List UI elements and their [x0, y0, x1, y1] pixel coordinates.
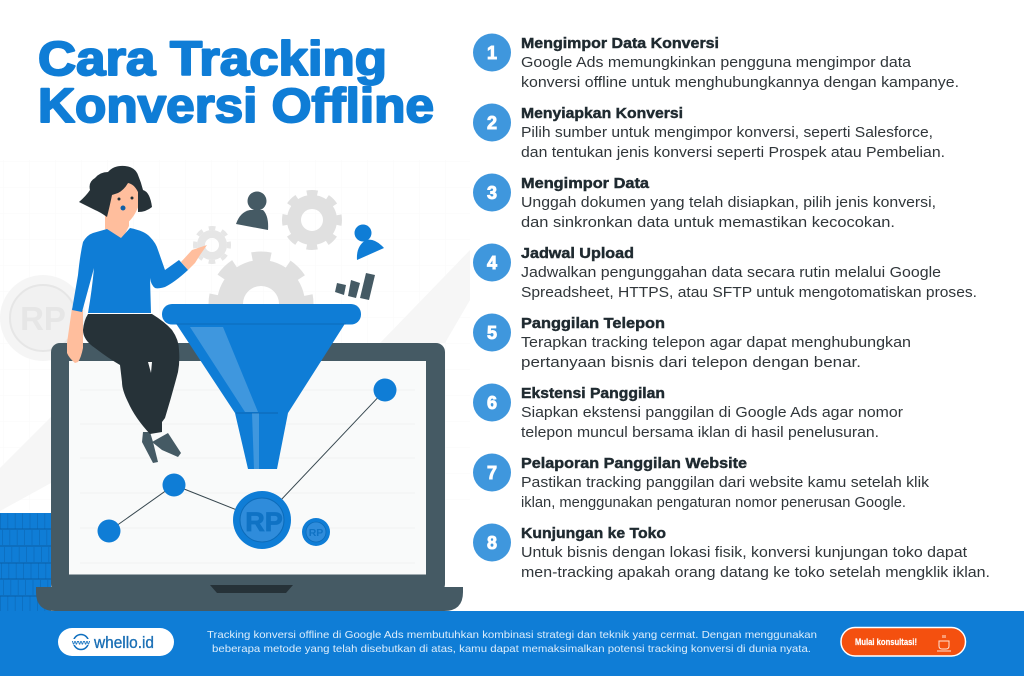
title: Konversi Offline: [38, 80, 434, 133]
step 6: Siapkan ekstensi panggilan di Google Ads agar nomor: [521, 405, 903, 421]
title: Cara Tracking: [38, 33, 387, 86]
illustration: laptop: [36, 343, 463, 611]
footer text: beberapa metode yang telah disebutkan di atas, kamu dapat memaksimalkan potensi tracking konversi di dunia nyata.: [212, 643, 811, 655]
step 2: 2: [487, 113, 497, 133]
step 7: iklan, menggunakan pengaturan nomor penerusan Google.: [521, 495, 906, 511]
icon: dark person: [236, 192, 268, 230]
background grid and diagonal arrow: [0, 160, 470, 511]
eyes: [118, 198, 120, 200]
illustration: line chart: [98, 378, 396, 549]
step 2: [473, 104, 945, 161]
step 8: [473, 524, 990, 581]
step 6: telepon muncul bersama iklan di hasil penelusuran.: [521, 425, 879, 441]
icon: small bar chart: [335, 273, 375, 300]
step 4: 4: [487, 253, 497, 273]
step 4: Jadwal Upload: [521, 245, 634, 262]
step 5: [473, 314, 911, 371]
face: [107, 180, 139, 223]
step 4: [473, 244, 977, 301]
step 8: Kunjungan ke Toko: [521, 525, 666, 542]
illustration: coin stacks: [0, 513, 51, 611]
step 6: 6: [487, 393, 497, 413]
step 8: men-tracking apakah orang datang ke toko setelah mengklik iklan.: [521, 565, 990, 581]
sweater: [72, 228, 188, 313]
title: [38, 33, 434, 133]
icon: blue person: [354, 224, 384, 260]
footer text: Tracking konversi offline di Google Ads membutuhkan kombinasi strategi dan teknik yang cermat. Dengan menggunakan: [207, 629, 817, 641]
illustration: background Rp coin: [0, 275, 86, 361]
call to action button: Mulai konsultasi!: [855, 637, 917, 647]
leg gap: [148, 362, 152, 373]
step 2: Menyiapkan Konversi: [521, 105, 683, 122]
illustration: background Rp coin: RP: [20, 300, 66, 337]
step 3: Mengimpor Data: [521, 175, 650, 192]
step 7: Pastikan tracking panggilan dari website kamu setelah klik: [521, 475, 930, 491]
illustration: funnel: [162, 304, 361, 469]
logo pill: www: [71, 640, 91, 646]
step 1: Mengimpor Data Konversi: [521, 35, 719, 52]
logo pill: [58, 628, 174, 656]
step 8: 8: [487, 533, 497, 553]
steps list: [473, 34, 990, 581]
hair: [79, 166, 152, 217]
left hand: [67, 308, 83, 363]
pants: [83, 314, 179, 434]
call to action button: [841, 628, 966, 656]
illustration: gears: [193, 190, 342, 304]
hand on gear: [181, 245, 207, 270]
step 6: Ekstensi Panggilan: [521, 385, 665, 402]
step 3: Unggah dokumen yang telah disiapkan, pilih jenis konversi,: [521, 195, 936, 211]
step 3: [473, 174, 936, 231]
step 5: pertanyaan bisnis dari telepon dengan benar.: [521, 355, 861, 371]
step 1: [473, 34, 959, 91]
lips: [120, 206, 126, 210]
shoes: [142, 432, 158, 463]
footer band: [0, 611, 1024, 676]
step 7: 7: [487, 463, 497, 483]
step 7: [473, 454, 930, 511]
step 3: dan sinkronkan data untuk memastikan kecocokan.: [521, 215, 895, 231]
step 5: 5: [487, 323, 497, 343]
step 5: Terapkan tracking telepon agar dapat menghubungkan: [521, 335, 911, 351]
step 5: Panggilan Telepon: [521, 315, 665, 332]
step 6: [473, 384, 903, 441]
step 3: 3: [487, 183, 497, 203]
footer text: [207, 629, 817, 655]
step 1: konversi offline untuk menghubungkannya dengan kampanye.: [521, 75, 959, 91]
step 4: Jadwalkan pengunggahan data secara rutin melalui Google: [521, 265, 941, 281]
step 1: 1: [487, 43, 497, 63]
step 2: dan tentukan jenis konversi seperti Prospek atau Pembelian.: [521, 145, 945, 161]
step 7: Pelaporan Panggilan Website: [521, 455, 747, 472]
step 1: Google Ads memungkinkan pengguna mengimpor data: [521, 55, 912, 71]
logo pill: whello.id: [93, 633, 154, 652]
neck: [105, 210, 129, 240]
step 8: Untuk bisnis dengan lokasi fisik, konversi kunjungan toko dapat: [521, 545, 967, 561]
illustration: line chart: RP: [309, 527, 323, 539]
illustration: line chart: RP: [245, 507, 283, 537]
step 2: Pilih sumber untuk mengimpor konversi, seperti Salesforce,: [521, 125, 933, 141]
illustration: woman sitting on laptop: [67, 166, 207, 463]
step 4: Spreadsheet, HTTPS, atau SFTP untuk mengotomatiskan proses.: [521, 285, 977, 301]
